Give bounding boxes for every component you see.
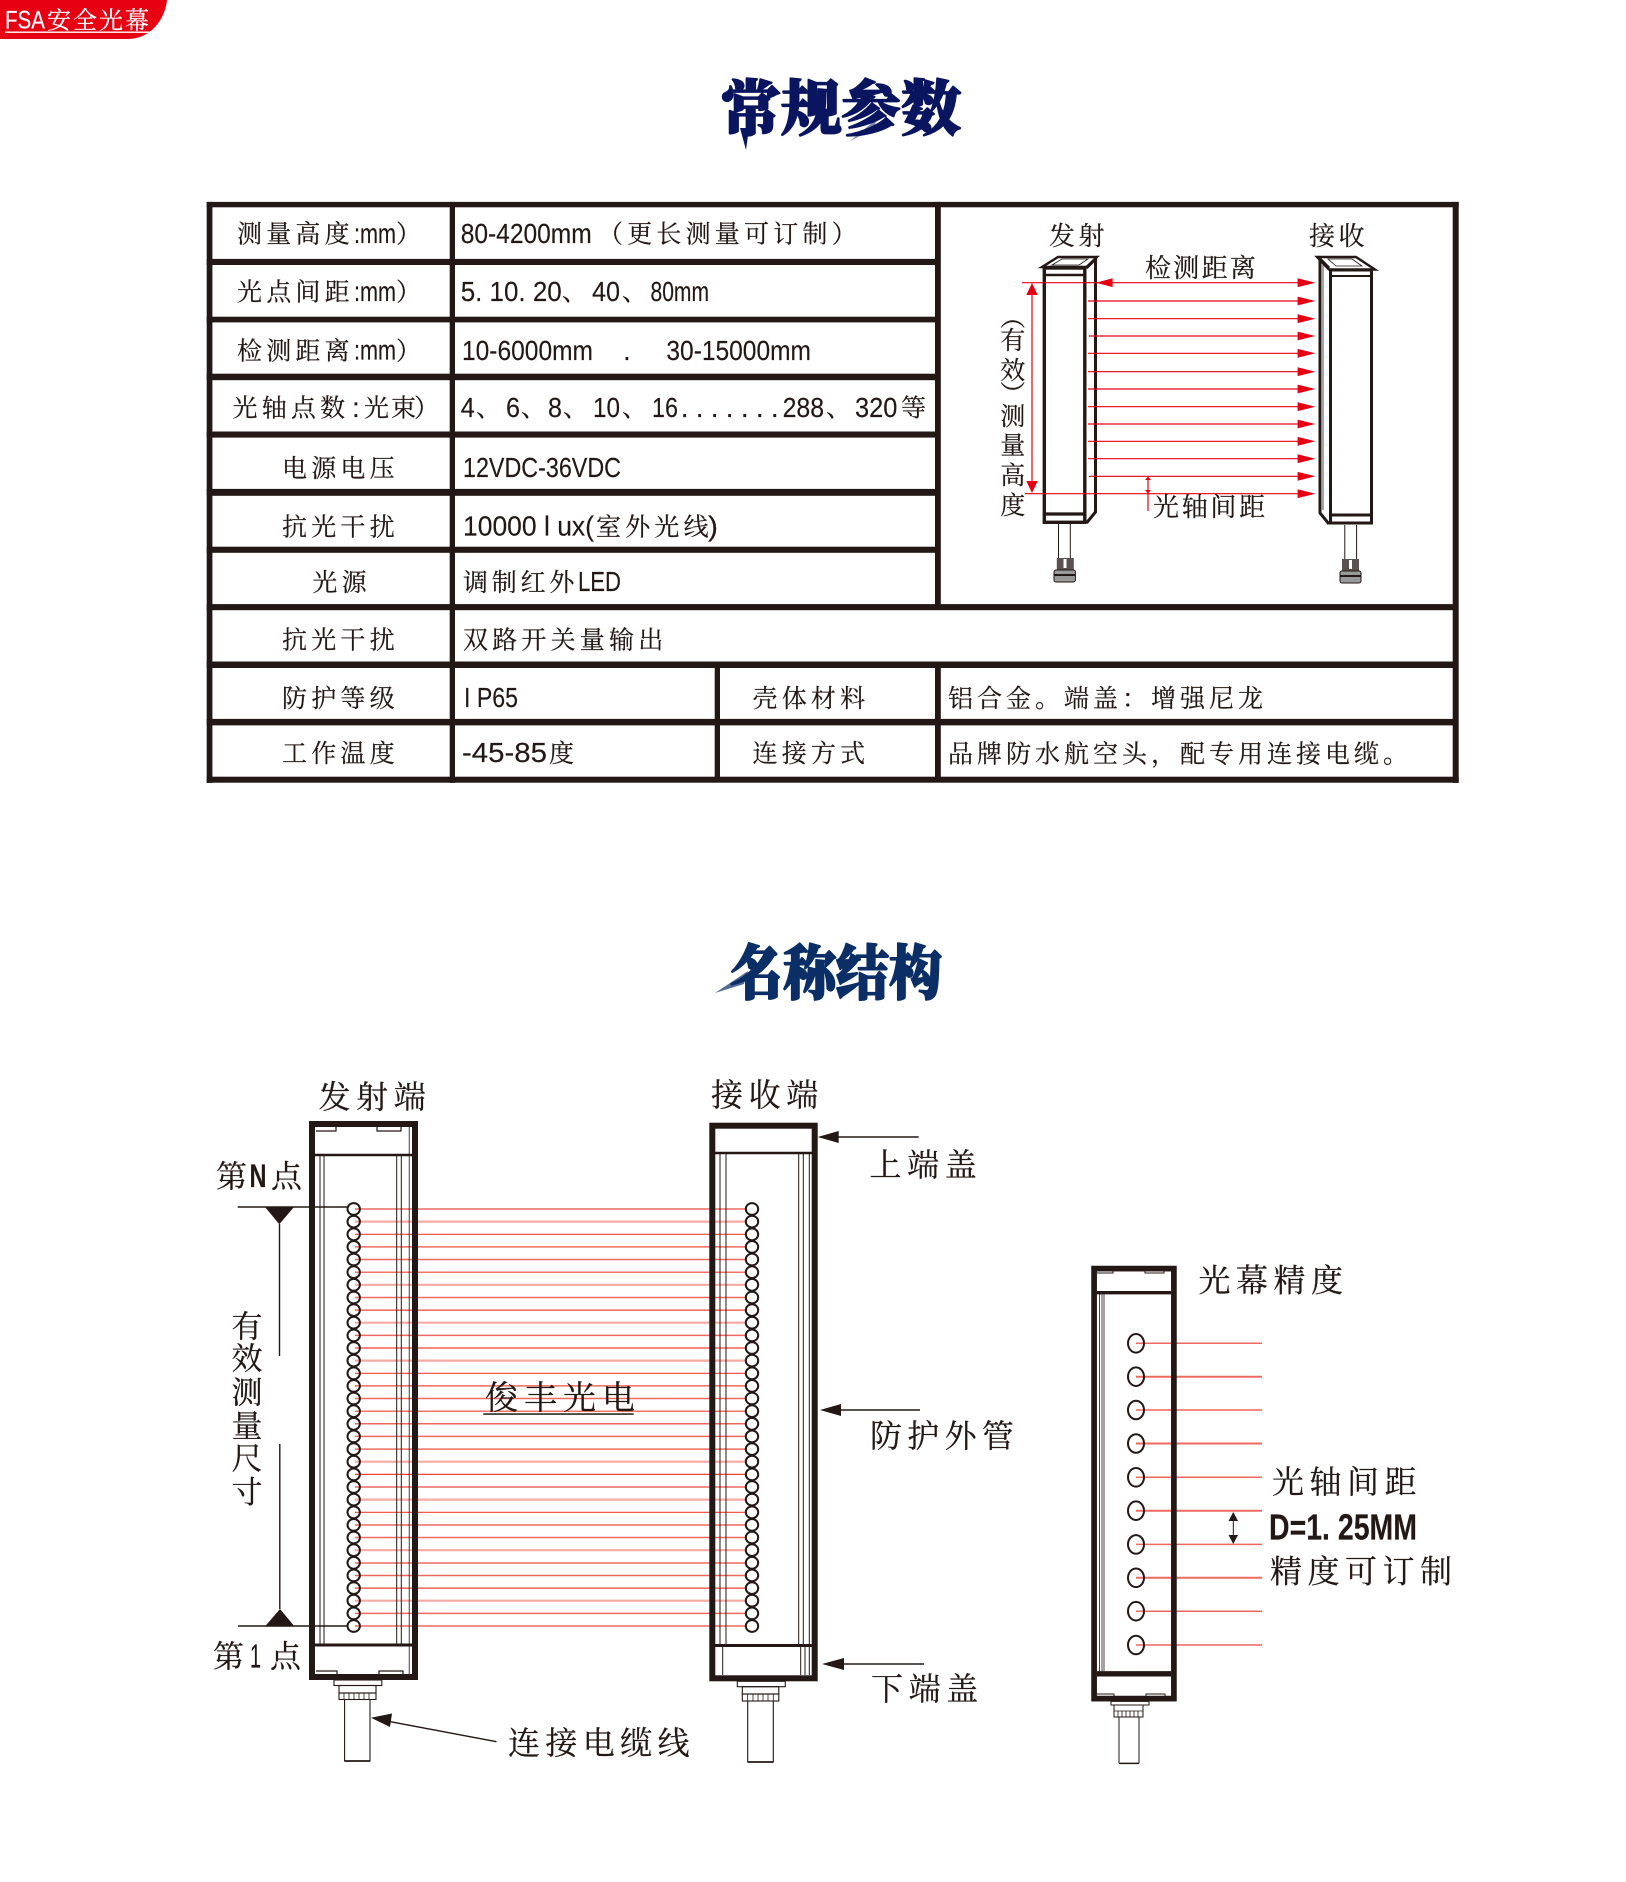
label: （有效）测量高度: 测 — [1000, 403, 1025, 431]
row: 光源: 调制红外 — [463, 569, 578, 597]
label: 接收: 接收 — [1309, 222, 1368, 251]
row: 光轴点数: 320 — [855, 392, 897, 423]
panel: parameter table — [207, 202, 1459, 783]
receiver light points — [746, 1203, 758, 1632]
row: 光点间距: 、 — [562, 280, 591, 307]
row: 光轴点数: 6 — [506, 392, 520, 423]
row: 光轴点数: 288 — [783, 392, 824, 423]
row: 检测距离: 30-15000mm — [666, 335, 811, 366]
label: （有效）测量高度: 有 — [1000, 327, 1025, 355]
row: 防护等级 壳体材料: 铝合金。端盖：增强尼龙 — [948, 685, 1267, 713]
row: 抗光干扰 双路开关量输出: 抗光干扰 — [282, 626, 399, 654]
row: 抗光干扰 10000lux: ) — [708, 511, 718, 542]
label: 精度可订制: 精度可订制 — [1270, 1554, 1458, 1590]
row: 光点间距: 、 — [622, 280, 651, 307]
label: 有效测量尺寸: 有 — [232, 1310, 262, 1344]
row: 光源: LED — [578, 566, 621, 597]
icon: precision detail unit — [1094, 1269, 1262, 1763]
icon: receiver bar — [1317, 257, 1375, 583]
row: 防护等级 壳体材料: 壳体材料 — [752, 685, 869, 713]
row: 光轴点数: 10 — [593, 392, 620, 423]
row: 光点间距: :mm — [354, 276, 396, 307]
row: 工作温度 连接方式: 度 — [549, 740, 578, 768]
badge: FSA安全光幕: FSA — [5, 6, 45, 34]
row: 防护等级 壳体材料: I P65 — [464, 682, 518, 713]
row: 防护等级 壳体材料: 防护等级 — [282, 685, 399, 713]
arrows: light beams — [1022, 278, 1315, 498]
row: 防护等级 壳体材料 — [282, 682, 1267, 713]
row: 抗光干扰 双路开关量输出: 双路开关量输出 — [463, 626, 667, 654]
arrow and label: 防护外管: 防护外管 — [870, 1418, 1019, 1454]
arrow and label: 上端盖 — [818, 1131, 982, 1183]
label: 接收端: 接收端 — [711, 1077, 824, 1113]
receiver connector and cable — [737, 1681, 785, 1762]
label: （有效）测量高度: 量 — [1000, 432, 1025, 460]
row: 光轴点数: 、 — [826, 396, 855, 423]
arrow: measuring height — [1026, 283, 1038, 493]
row: 测量高度: ） — [396, 221, 425, 249]
badge: FSA安全光幕: 安全光幕 — [47, 8, 151, 34]
label: 第N点 — [216, 1158, 303, 1194]
arrow: measuring range marker — [238, 1207, 348, 1626]
chart: detection diagram — [1000, 222, 1375, 583]
row: 检测距离: ） — [396, 337, 425, 365]
row: 光点间距 — [237, 276, 709, 307]
arrow and label: 连接电缆线: 连接电缆线 — [508, 1725, 695, 1761]
label: 有效测量尺寸 — [232, 1310, 262, 1510]
precision connector and cable — [1111, 1701, 1149, 1763]
label: 光轴间距: 光轴间距 — [1153, 493, 1268, 522]
row: 抗光干扰 10000lux: 抗光干扰 — [282, 513, 399, 541]
row: 光点间距: 光点间距 — [237, 279, 354, 307]
row: 光源: 光源 — [312, 569, 371, 597]
emitter light points — [348, 1203, 360, 1632]
label: 有效测量尺寸: 尺 — [232, 1442, 262, 1476]
precision light points — [1128, 1334, 1144, 1654]
row: 抗光干扰 10000lux: 10000 l ux( — [463, 511, 595, 542]
row: 光轴点数: 、 — [622, 396, 651, 423]
row: 光轴点数: ） — [414, 395, 443, 423]
row: 测量高度: 测量高度 — [237, 221, 354, 249]
badge: FSA安全光幕 — [0, 0, 167, 39]
label: 第N点: 点 — [271, 1160, 303, 1194]
row: 光轴点数: 、 — [521, 396, 550, 423]
row: 光轴点数: : — [352, 392, 360, 423]
label: （有效）测量高度: 度 — [1000, 492, 1025, 520]
row: 工作温度 连接方式: 连接方式 — [752, 740, 869, 768]
label: 检测距离: 检测距离 — [1145, 254, 1258, 283]
label: 有效测量尺寸: 量 — [232, 1409, 262, 1444]
label: 第1点: 第 — [213, 1640, 244, 1674]
label: 有效测量尺寸: 寸 — [232, 1475, 262, 1510]
row: 光轴点数: 、 — [476, 396, 505, 423]
label: （有效）测量高度 — [1000, 305, 1025, 520]
row: 抗光干扰 10000lux: 室外光线 — [596, 513, 713, 541]
label: 发射: 发射 — [1049, 222, 1108, 251]
table grid — [207, 202, 1459, 783]
row: 光轴点数: 光轴点数 — [232, 395, 349, 423]
row: 工作温度 连接方式: 工作温度 — [282, 740, 399, 768]
row: 电源电压 — [282, 452, 621, 483]
row: 光点间距: 40 — [592, 276, 620, 307]
label: 俊丰光电: 俊丰光电 — [485, 1380, 641, 1417]
label: 发射端: 发射端 — [318, 1079, 431, 1115]
icon: emitter bar — [1042, 257, 1097, 582]
arrow and label: 连接电缆线 — [371, 1714, 695, 1761]
row: 测量高度: 80-4200mm — [461, 218, 592, 249]
arrow and label: 下端盖 — [822, 1658, 984, 1707]
row: 光轴点数: ....... — [681, 392, 779, 423]
emitter connector and cable — [334, 1680, 382, 1761]
icon: receiver unit — [712, 1126, 815, 1762]
row: 光轴点数: 等 — [901, 395, 930, 423]
row: 光轴点数: 光束 — [364, 395, 418, 423]
row: 抗光干扰 双路开关量输出 — [282, 626, 667, 654]
label: 有效测量尺寸: 效 — [232, 1342, 262, 1376]
label: 光幕精度: 光幕精度 — [1198, 1262, 1349, 1298]
label: （有效）测量高度: ︵ — [1000, 305, 1025, 332]
row: 光轴点数 — [232, 392, 930, 423]
label: （有效）测量高度: ︶ — [1000, 382, 1025, 409]
row: 光轴点数: 、 — [563, 396, 592, 423]
arrow: precision spacing — [1228, 1512, 1238, 1544]
arrow and label: 上端盖: 上端盖 — [870, 1147, 982, 1183]
label: （有效）测量高度: 高 — [1000, 462, 1025, 490]
row: 工作温度 连接方式: 品牌防水航空头，配专用连接电缆。 — [948, 740, 1412, 768]
panel: structure diagram — [213, 1077, 1458, 1763]
label: （有效）测量高度: 效 — [1000, 357, 1025, 385]
row: 电源电压: 12VDC-36VDC — [463, 452, 621, 483]
row: 工作温度 连接方式 — [282, 737, 1412, 768]
label: 第1点: 点 — [270, 1640, 302, 1674]
label: 第N点: 第 — [216, 1160, 247, 1194]
row: 光源 — [312, 566, 621, 597]
row: 电源电压: 电源电压 — [282, 455, 399, 483]
row: 光点间距: 5. 10. 20 — [461, 276, 562, 307]
heading: 名称结构: 名称结构 — [730, 942, 942, 1008]
arrow: axis spacing — [1145, 476, 1151, 511]
row: 工作温度 连接方式: -45-85 — [462, 737, 547, 768]
row: 光点间距: ） — [396, 279, 425, 307]
row: 检测距离: 检测距离 — [237, 337, 354, 365]
label: 第1点: 1 — [250, 1638, 261, 1674]
label: 第N点: N — [250, 1158, 266, 1194]
row: 检测距离: . — [623, 335, 631, 366]
row: 检测距离: 10-6000mm — [462, 335, 593, 366]
row: 光轴点数: 8 — [548, 392, 562, 423]
label: 有效测量尺寸: 测 — [232, 1376, 262, 1410]
arrow and label: 下端盖: 下端盖 — [871, 1671, 984, 1707]
row: 测量高度 — [237, 218, 861, 249]
row: 光点间距: 80mm — [650, 276, 709, 307]
label: D=1.25MM: D=1. 25MM — [1269, 1506, 1417, 1548]
row: 光轴点数: 4 — [461, 392, 475, 423]
row: 检测距离: :mm — [354, 335, 396, 366]
label: 第1点 — [213, 1638, 302, 1674]
row: 抗光干扰 10000lux — [282, 511, 718, 542]
row: 光轴点数: 16 — [652, 392, 678, 423]
precision beams — [1136, 1343, 1262, 1645]
icon: emitter unit — [312, 1124, 415, 1761]
row: 检测距离 — [237, 335, 811, 366]
arrow and label: 防护外管 — [820, 1404, 1019, 1454]
row: 测量高度: :mm — [354, 218, 396, 249]
row: 测量高度: （更长测量可订制） — [598, 221, 861, 249]
chart: light beams between emitter and receiver — [355, 1209, 746, 1626]
heading: 常规参数: 常规参数 — [721, 77, 961, 143]
label: 光轴间距: 光轴间距 — [1272, 1464, 1422, 1500]
